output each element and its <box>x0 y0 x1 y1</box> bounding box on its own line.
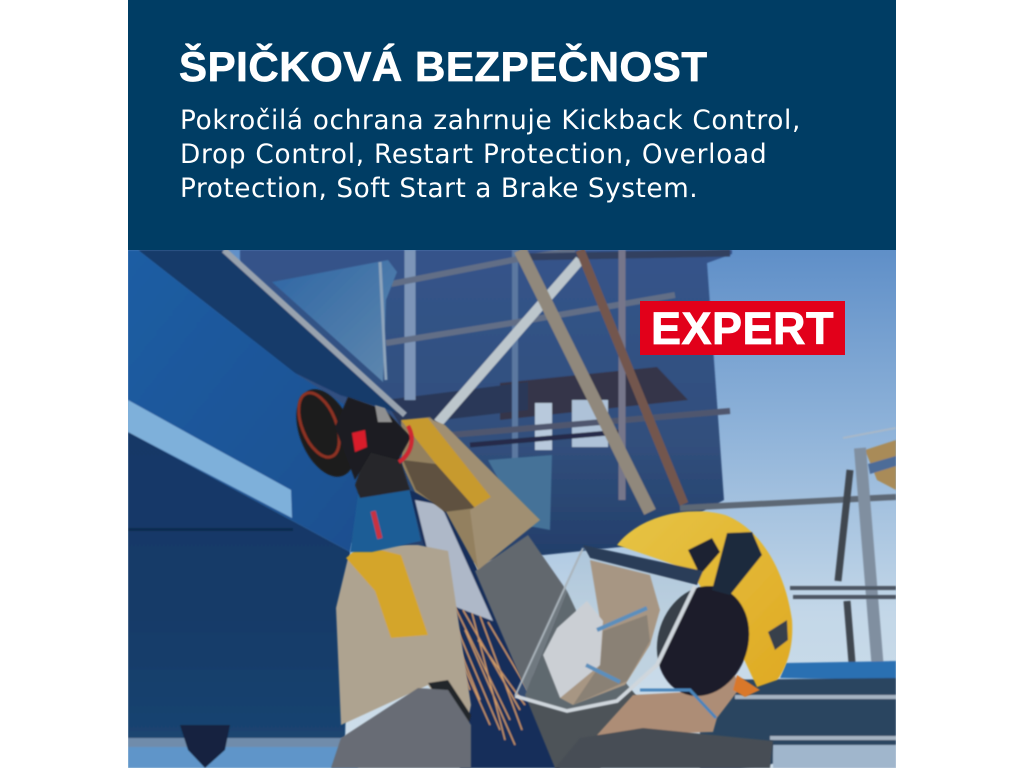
angle grinder <box>285 381 421 552</box>
work jacket collar <box>555 728 773 768</box>
strap <box>640 690 716 718</box>
photo: worker grinding a steel beam <box>128 250 896 768</box>
light paint band <box>128 400 292 518</box>
neck <box>597 671 740 735</box>
description text: Protection, Soft Start a Brake System. <box>180 174 698 204</box>
description text <box>180 106 801 204</box>
distant scaffold on the right <box>700 428 896 768</box>
face <box>560 560 660 705</box>
distant building and scaffolding <box>240 250 896 570</box>
title: ŠPIČKOVÁ BEZPEČNOST <box>179 43 708 90</box>
helmet <box>617 511 792 687</box>
EXPERT badge: EXPERT <box>651 303 834 354</box>
dust mask <box>543 601 603 698</box>
beam side plate <box>272 260 397 382</box>
steel beams <box>128 250 552 768</box>
beam web <box>128 250 365 552</box>
description text: Pokročilá ochrana zahrnuje Kickback Control, <box>180 106 801 136</box>
sky <box>128 250 896 768</box>
weld seam <box>224 250 405 415</box>
header panel <box>128 0 896 250</box>
lower right plate <box>488 455 552 530</box>
welding gloves and sleeves <box>331 417 640 768</box>
dark underside <box>128 432 350 740</box>
worker head with helmet, mask, ear muffs and visor <box>515 511 792 768</box>
beam underside flange <box>138 250 405 415</box>
visor <box>515 548 695 711</box>
sparks <box>408 490 560 768</box>
description text: Drop Control, Restart Protection, Overload <box>180 140 767 170</box>
ear muffs <box>643 574 763 708</box>
